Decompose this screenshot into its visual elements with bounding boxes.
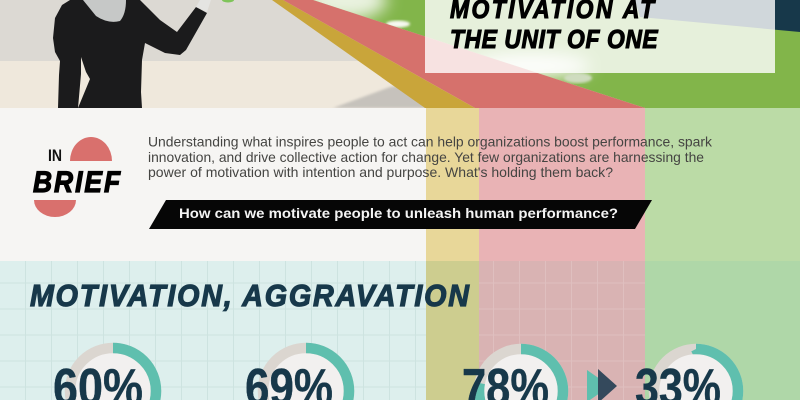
hand: [196, 0, 211, 12]
ring value: [70, 348, 156, 400]
gold light beam: [272, 0, 475, 108]
pale teal background: [0, 261, 800, 400]
paper background: [0, 108, 800, 261]
red stripe: [479, 108, 645, 261]
word brief: BRIEF: [33, 164, 121, 198]
word in: IN: [48, 147, 62, 165]
ring track: [654, 349, 738, 400]
bottom red semicircle: [34, 200, 76, 217]
arrow: decline: [587, 369, 617, 400]
ring value: [263, 348, 349, 400]
floor shadow: [333, 85, 428, 108]
stat: 33 percent: [635, 349, 738, 400]
line one: Understanding what inspires people to act can help organizations boost performance, spark: [148, 134, 712, 150]
hero wall background: [0, 0, 800, 62]
white clouds: [303, 0, 592, 83]
in brief badge: [33, 137, 121, 217]
line two: innovation, and drive collective action for change. Yet few organizations are harnessing the: [148, 150, 704, 165]
green field: [313, 0, 800, 108]
brief section background: [0, 108, 800, 261]
gold stripe: [426, 261, 479, 400]
gap between arm and waist: [78, 57, 90, 108]
grid: [0, 261, 800, 400]
top red semicircle: [70, 137, 112, 161]
navy wedge: [635, 0, 800, 32]
hero floor background: [0, 61, 800, 108]
line three: power of motivation with intention and purpose. What's holding them back?: [148, 165, 613, 180]
question banner: [149, 200, 652, 229]
title panel: [425, 0, 775, 73]
gold stripe: [426, 108, 479, 261]
ring track: [70, 348, 156, 400]
stat: 69 percent: [245, 348, 349, 400]
navy chevron: [598, 369, 617, 400]
ring value: [479, 349, 563, 400]
intro paragraph: [148, 134, 712, 180]
stat: 78 percent: [462, 349, 563, 400]
red light beam: [283, 0, 645, 108]
red stripe grid: [479, 261, 645, 400]
ring value: [654, 349, 738, 400]
section heading: MOTIVATION, AGGRAVATION: [30, 279, 470, 313]
stats section background: [0, 261, 800, 400]
green stripe: [645, 108, 800, 261]
woman figure: [53, 0, 234, 108]
hero collage: [0, 0, 800, 108]
black banner shape: [149, 200, 652, 229]
title line two: THE UNIT OF ONE: [450, 26, 658, 54]
green held object: [222, 0, 234, 2]
teal chevron: [587, 370, 610, 400]
torso and arm: [53, 0, 207, 108]
ring track: [263, 348, 349, 400]
neck: [83, 0, 126, 22]
stat: 60 percent: [53, 348, 156, 400]
red stripe: [479, 261, 645, 400]
ring track: [479, 349, 563, 400]
green stripe: [645, 261, 800, 400]
translucent panel: [425, 0, 775, 73]
banner text: How can we motivate people to unleash human performance?: [179, 206, 618, 221]
